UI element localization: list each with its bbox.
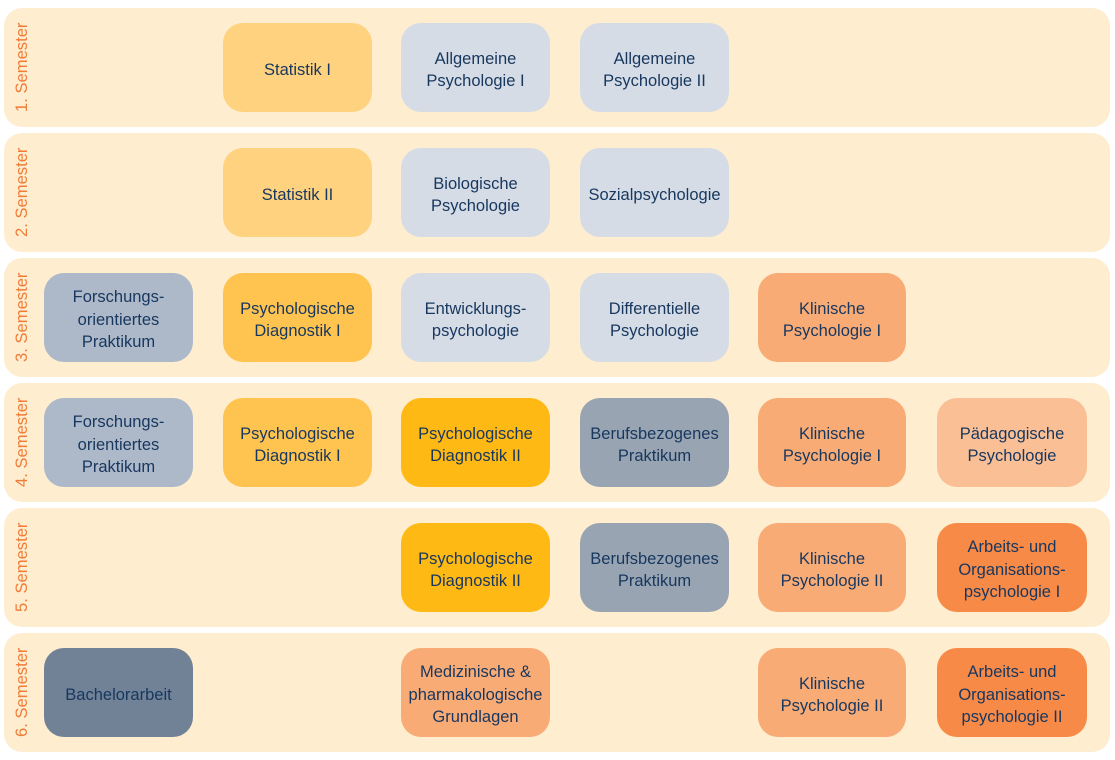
module: Allgemeine Psychologie II: Allgemeine <box>614 50 695 68</box>
panel: 2. Semester <box>4 133 1110 252</box>
module: Psychologische Diagnostik I: Psychologische <box>240 300 355 318</box>
module: Entwicklungspsychologie: Entwicklungs- <box>425 300 526 318</box>
module: Sozialpsychologie: Sozialpsychologie <box>588 186 721 204</box>
module: Klinische Psychologie II: Klinische <box>799 550 865 568</box>
module: Psychologische Diagnostik I: Diagnostik I <box>254 322 341 340</box>
module: Differentielle Psychologie <box>580 273 729 362</box>
module: Bachelorarbeit <box>44 648 193 737</box>
panel: 5. Semester <box>4 508 1110 627</box>
module: Pädagogische Psychologie: Pädagogische <box>960 424 1064 442</box>
module: Klinische Psychologie I: Psychologie I <box>783 322 881 340</box>
module: Berufsbezogenes Praktikum: Praktikum <box>618 572 691 590</box>
module: Pädagogische Psychologie: Psychologie <box>968 447 1056 465</box>
module: Forschungsorientiertes Praktikum <box>44 273 193 362</box>
module: Medizinische & pharmakologische Grundlagen <box>401 648 550 737</box>
module: Klinische Psychologie I: Klinische <box>799 300 865 318</box>
module: Arbeits- und Organisationspsychologie I <box>937 523 1087 612</box>
module: Biologische Psychologie <box>401 148 550 237</box>
label: 2. Semester: 2. Semester <box>12 148 31 237</box>
module: Forschungsorientiertes Praktikum: orientiertes <box>78 436 159 454</box>
module: Allgemeine Psychologie I: Allgemeine <box>435 50 516 68</box>
module: Statistik II <box>223 148 372 237</box>
module: Allgemeine Psychologie II <box>580 23 729 112</box>
module: Pädagogische Psychologie <box>937 398 1087 487</box>
module: Psychologische Diagnostik I <box>223 273 372 362</box>
module: Entwicklungspsychologie: psychologie <box>432 322 519 340</box>
module: Klinische Psychologie II: Psychologie II <box>781 697 883 715</box>
panel: 3. Semester <box>4 258 1110 377</box>
module: Psychologische Diagnostik I: Diagnostik I <box>254 447 341 465</box>
module: Medizinische & pharmakologische Grundlagen: Grundlagen <box>432 708 519 726</box>
module: Klinische Psychologie I <box>758 398 906 487</box>
module: Forschungsorientiertes Praktikum <box>44 398 193 487</box>
module: Biologische Psychologie: Psychologie <box>431 197 520 215</box>
module: Berufsbezogenes Praktikum <box>580 398 729 487</box>
module: Arbeits- und Organisationspsychologie I: Organisations- <box>958 561 1066 579</box>
panel: 1. Semester <box>4 8 1110 127</box>
panel: 6. Semester <box>4 633 1110 752</box>
module: Forschungsorientiertes Praktikum: Praktikum <box>82 458 155 476</box>
module: Medizinische & pharmakologische Grundlagen: pharmakologische <box>409 686 542 704</box>
module: Berufsbezogenes Praktikum: Praktikum <box>618 447 691 465</box>
module: Psychologische Diagnostik II: Diagnostik II <box>430 447 521 465</box>
module: Allgemeine Psychologie I: Psychologie I <box>426 72 525 90</box>
module: Klinische Psychologie I: Psychologie I <box>783 447 881 465</box>
module: Klinische Psychologie II <box>758 648 906 737</box>
module: Arbeits- und Organisationspsychologie I: psychologie I <box>964 583 1060 601</box>
module: Psychologische Diagnostik II: Psychologische <box>418 550 533 568</box>
module: Psychologische Diagnostik II <box>401 398 550 487</box>
module: Psychologische Diagnostik I <box>223 398 372 487</box>
label: 6. Semester: 6. Semester <box>12 648 31 737</box>
label: 1. Semester: 1. Semester <box>12 23 31 112</box>
label: 4. Semester: 4. Semester <box>12 398 31 487</box>
module: Klinische Psychologie I <box>758 273 906 362</box>
module: Psychologische Diagnostik II: Psychologische <box>418 424 533 442</box>
module: Berufsbezogenes Praktikum <box>580 523 729 612</box>
module: Psychologische Diagnostik I: Psychologische <box>240 424 355 442</box>
module: Entwicklungspsychologie <box>401 273 550 362</box>
label: 5. Semester: 5. Semester <box>12 523 31 612</box>
module: Statistik I: Statistik I <box>264 61 331 79</box>
module: Allgemeine Psychologie II: Psychologie II <box>603 72 706 90</box>
module: Differentielle Psychologie: Differentielle <box>609 300 700 318</box>
module: Statistik II: Statistik II <box>262 186 333 204</box>
module: Klinische Psychologie II: Klinische <box>799 674 865 692</box>
module: Sozialpsychologie <box>580 148 729 237</box>
module: Berufsbezogenes Praktikum: Berufsbezogenes <box>590 424 719 442</box>
module: Berufsbezogenes Praktikum: Berufsbezogenes <box>590 550 719 568</box>
module: Klinische Psychologie II: Psychologie II <box>781 572 883 590</box>
module: Forschungsorientiertes Praktikum: orientiertes <box>78 311 159 329</box>
module: Biologische Psychologie: Biologische <box>433 174 518 192</box>
module: Psychologische Diagnostik II: Diagnostik II <box>430 572 521 590</box>
module: Arbeits- und Organisationspsychologie II <box>937 648 1087 737</box>
module: Forschungsorientiertes Praktikum: Praktikum <box>82 333 155 351</box>
module: Allgemeine Psychologie I <box>401 23 550 112</box>
module: Forschungsorientiertes Praktikum: Forschungs- <box>73 413 164 431</box>
module: Medizinische & pharmakologische Grundlagen: Medizinische & <box>420 663 531 681</box>
module: Bachelorarbeit: Bachelorarbeit <box>65 686 172 704</box>
module: Forschungsorientiertes Praktikum: Forschungs- <box>73 288 164 306</box>
module: Klinische Psychologie II <box>758 523 906 612</box>
module: Arbeits- und Organisationspsychologie I: Arbeits- und <box>968 538 1056 556</box>
module: Klinische Psychologie I: Klinische <box>799 424 865 442</box>
module: Arbeits- und Organisationspsychologie II: Arbeits- und <box>968 663 1056 681</box>
module: Arbeits- und Organisationspsychologie II: Organisations- <box>958 686 1066 704</box>
label: 3. Semester: 3. Semester <box>12 273 31 362</box>
module: Differentielle Psychologie: Psychologie <box>610 322 699 340</box>
panel: 4. Semester <box>4 383 1110 502</box>
module: Psychologische Diagnostik II <box>401 523 550 612</box>
module: Statistik I <box>223 23 372 112</box>
module: Arbeits- und Organisationspsychologie II: psychologie II <box>962 708 1062 726</box>
